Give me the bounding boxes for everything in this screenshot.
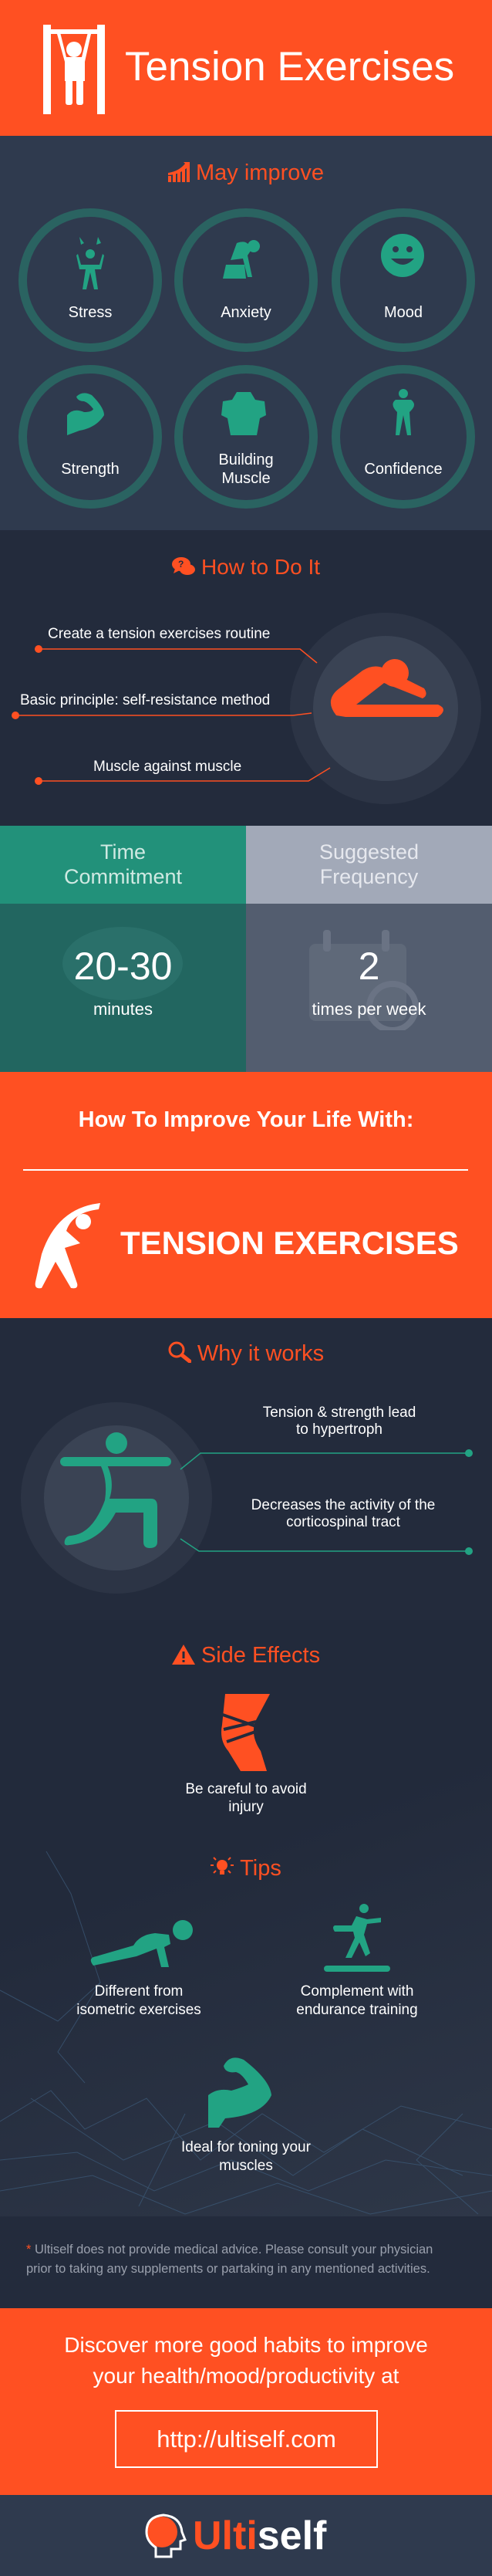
tip 1: Different from [95, 1983, 183, 2000]
network background [0, 1851, 492, 2215]
heading: how to do it: How to Do It [201, 555, 320, 579]
heading: how to do it: ? [178, 559, 184, 570]
illustration: circle with figure [12, 613, 481, 804]
reason 2 [251, 1497, 435, 1530]
tip 2: Complement with [301, 1983, 413, 2000]
panel: side effects & tips [0, 1620, 492, 2216]
item: confidence: Confidence [364, 461, 443, 478]
item: stress: Stress [69, 304, 112, 321]
item: building muscle [174, 365, 318, 509]
item: anxiety: Anxiety [221, 304, 271, 321]
tip 3: muscles [219, 2158, 273, 2174]
icon: pull-up [43, 25, 105, 114]
reason 1: Tension & strength lead [263, 1405, 416, 1421]
item: confidence [332, 365, 475, 509]
text: injury: Be careful to avoid [185, 1781, 307, 1797]
reason 1 [263, 1405, 416, 1438]
item: mood: Mood [384, 304, 423, 321]
item: building muscle: Muscle [221, 470, 271, 487]
cta text: Discover more good habits to improve [64, 2333, 428, 2357]
header: Suggested [319, 840, 419, 864]
item: stress [19, 208, 162, 352]
reason 2: Decreases the activity of the [251, 1497, 435, 1513]
heading: Why it works [197, 1341, 324, 1366]
icon: brain head [145, 2514, 187, 2557]
tip 2 [296, 1904, 418, 2018]
icon: pushup [91, 1920, 193, 1967]
panel: suggested frequency: times per week [312, 999, 426, 1019]
panel: suggested frequency [246, 826, 492, 1072]
heading: tips: Tips [240, 1856, 281, 1881]
header [0, 826, 246, 904]
panel: may improve [0, 136, 492, 530]
text: injury: injury [228, 1799, 264, 1815]
value: 20-30 [74, 945, 172, 988]
heading: tips [211, 1856, 281, 1881]
header: Commitment [64, 865, 182, 888]
header [0, 0, 492, 136]
panel: why it works [0, 1318, 492, 1620]
panel: side effects & tips: endurance training [296, 2002, 418, 2018]
item: building muscle: Building [218, 451, 274, 468]
header: Frequency [320, 865, 418, 888]
icon: stretching figure [35, 1203, 100, 1289]
disclaimer: prior to taking any supplements or partaking in any mentioned activities. [26, 2262, 430, 2276]
disclaimer [26, 2243, 433, 2276]
tip 3 [181, 2057, 311, 2174]
step 2: Basic principle: self-resistance method [20, 692, 270, 708]
panel: time commitment [0, 826, 246, 1072]
icon: treadmill [324, 1904, 390, 1972]
disclaimer: * Ultiself does not provide medical advice. Please consult your physician [26, 2243, 433, 2257]
panel: time commitment: minutes [93, 999, 153, 1019]
panel: how to do it [0, 530, 492, 826]
icon: calendar [309, 930, 419, 1030]
value: 2 [359, 945, 379, 988]
wordmark: Ultiself [193, 2513, 326, 2558]
item: strength: Strength [61, 461, 120, 478]
icon: knee [221, 1694, 270, 1771]
illustration [21, 1402, 473, 1594]
reason 1: to hypertroph [296, 1422, 382, 1438]
footer [0, 2495, 492, 2576]
banner: how to improve [0, 1072, 492, 1318]
heading: side effects: Side Effects [201, 1643, 320, 1668]
item: mood [332, 208, 475, 352]
url box [115, 2410, 378, 2468]
header: Time [100, 840, 146, 864]
url box: http://ultiself.com [157, 2426, 336, 2453]
call to action [0, 2308, 492, 2495]
logo [145, 2513, 327, 2558]
item: anxiety [174, 208, 318, 352]
step 1: Create a tension exercises routine [48, 626, 270, 642]
subtitle: How To Improve Your Life With: [79, 1107, 413, 1132]
tip 1 [76, 1920, 201, 2018]
step 3: Muscle against muscle [93, 759, 241, 775]
cta text [64, 2333, 428, 2388]
tip 3: Ideal for toning your [181, 2139, 311, 2155]
reason 2: corticospinal tract [286, 1514, 400, 1530]
title: Tension Exercises [125, 44, 454, 90]
item: strength [19, 365, 162, 509]
header [246, 826, 492, 904]
text: injury [185, 1781, 307, 1815]
heading: may improve: May improve [196, 161, 324, 185]
cta text: your health/mood/productivity at [93, 2364, 399, 2388]
panel: side effects & tips: isometric exercises [76, 2002, 201, 2018]
icon: bicep [208, 2057, 271, 2128]
title: tension exercises: TENSION EXERCISES [120, 1225, 459, 1261]
